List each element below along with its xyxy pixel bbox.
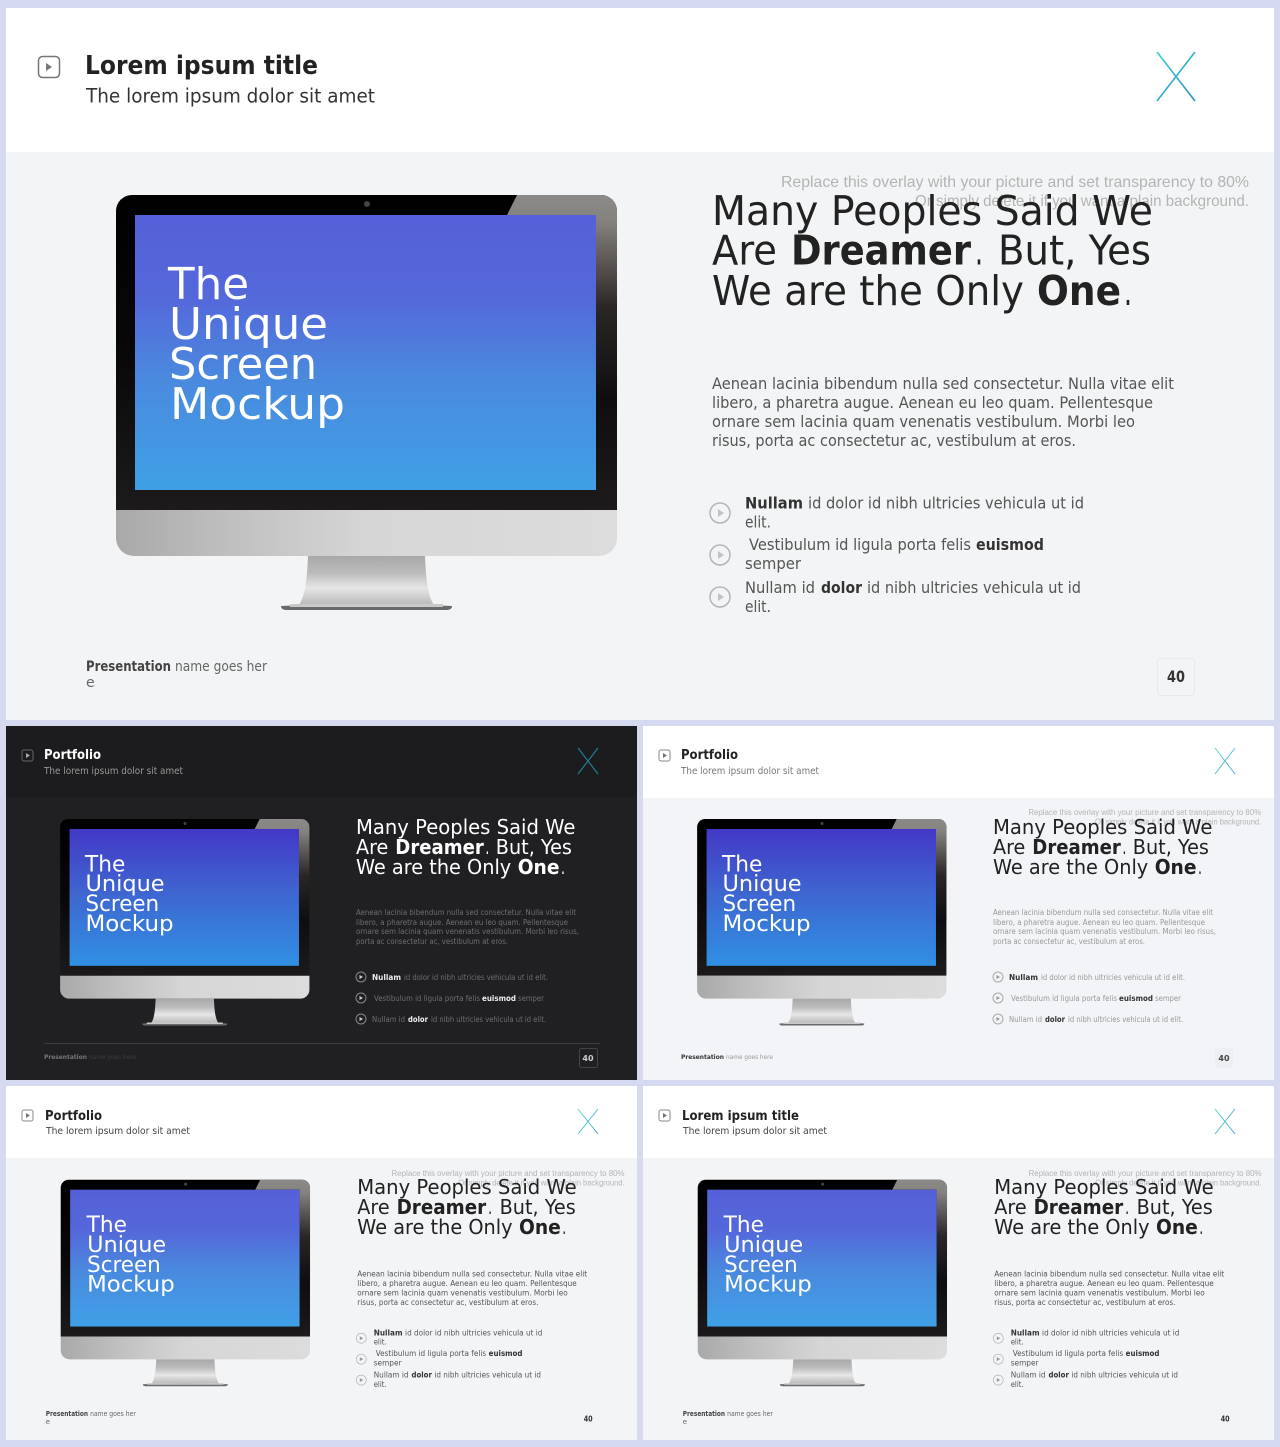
footer text: name goes her <box>727 1410 773 1418</box>
footer text: Presentation <box>86 659 171 675</box>
bullet text: dolor <box>412 1371 432 1380</box>
bullet text: semper <box>518 994 545 1003</box>
page number box <box>1215 1048 1233 1068</box>
icon: bullets <box>993 972 1003 1024</box>
body paragraph: risus, porta ac consectetur ac, vestibulum at eros. <box>357 1298 538 1307</box>
title: Lorem ipsum title <box>85 51 318 81</box>
panel: light slide bottom right <box>643 1086 1274 1440</box>
icon: bullets <box>356 972 366 1024</box>
screen caption: Unique <box>87 1233 166 1258</box>
heading: One <box>519 1215 561 1239</box>
icon: play square <box>22 1110 33 1121</box>
bullet text: elit. <box>374 1338 387 1347</box>
icon: bullet 3 <box>710 587 730 607</box>
page number text: 40 <box>584 1414 593 1423</box>
page number box <box>580 1048 598 1068</box>
bullet text: id nibh ultricies vehicula ut id <box>1071 1371 1178 1380</box>
heading: . <box>1199 1215 1203 1239</box>
heading: Many Peoples Said We <box>993 815 1212 839</box>
page number box: 40 <box>582 1054 594 1063</box>
main slide header band <box>6 8 1274 152</box>
heading: One <box>1156 1215 1198 1239</box>
screen caption: The <box>721 852 762 877</box>
heading: One <box>1037 267 1121 315</box>
bullet text: semper <box>374 1359 402 1368</box>
heading: Dreamer <box>397 1195 486 1219</box>
footer text: Presentation <box>44 1053 87 1061</box>
bullet list <box>356 972 548 1024</box>
heading: . <box>1198 855 1202 879</box>
icon: play square <box>659 750 670 761</box>
screen caption: Mockup <box>170 379 345 430</box>
monitor mockup and caption <box>61 1180 310 1386</box>
title: Portfolio <box>681 748 738 763</box>
heading: Dreamer <box>395 835 484 859</box>
bullet text: Nullam id <box>374 1371 409 1380</box>
body paragraph: libero, a pharetra augue. Aenean eu leo quam. Pellentesque <box>993 918 1205 927</box>
footer text: Presentation <box>683 1410 725 1418</box>
page number box <box>1158 658 1194 696</box>
bullet 1 text: id dolor id nibh ultricies vehicula ut id <box>808 494 1084 512</box>
heading: But, Yes <box>998 226 1151 274</box>
footer text: name goes here <box>726 1053 773 1061</box>
bullet text: Nullam <box>1009 973 1038 982</box>
bullet 3 text: dolor <box>821 578 862 597</box>
heading: But, Yes <box>496 835 572 859</box>
screen caption: The <box>84 852 125 877</box>
footer text: name goes here <box>89 1053 136 1061</box>
heading: Dreamer <box>791 226 972 274</box>
heading: Many Peoples Said We <box>356 815 575 839</box>
header band <box>6 1086 637 1158</box>
bullet text: euismod <box>482 994 516 1003</box>
heading: But, Yes <box>500 1195 576 1219</box>
bullet text: id dolor id nibh ultricies vehicula ut id elit. <box>404 973 548 982</box>
bullet 3 text: Nullam id <box>745 578 815 597</box>
text column <box>46 1169 625 1426</box>
bullet list <box>993 972 1185 1024</box>
icon: bullets <box>993 1333 1003 1385</box>
bullet text: euismod <box>1126 1349 1160 1358</box>
screen caption: Screen <box>169 339 317 390</box>
body paragraph: libero, a pharetra augue. Aenean eu leo quam. Pellentesque <box>357 1279 577 1288</box>
body paragraph: ornare sem lacinia quam venenatis vestibulum. Morbi leo risus, <box>356 927 579 936</box>
bullet text: Nullam id <box>1011 1371 1046 1380</box>
screen caption: Mockup <box>724 1273 812 1298</box>
panel: light slide bottom left <box>6 1086 637 1440</box>
bullet 2 text: euismod <box>976 535 1044 554</box>
bullet text: Nullam id <box>372 1015 405 1024</box>
panel: light slide top right <box>643 726 1274 1080</box>
screen caption: Unique <box>724 1233 803 1258</box>
screen caption: The <box>86 1213 127 1238</box>
bullet text: id dolor id nibh ultricies vehicula ut id <box>405 1328 542 1337</box>
bullet 2 text: semper <box>745 554 801 573</box>
overlay note: Replace this overlay with your picture and set transparency to 80% <box>781 174 1249 191</box>
body paragraph: Aenean lacinia bibendum nulla sed consectetur. Nulla vitae elit <box>356 908 576 917</box>
body paragraph: libero, a pharetra augue. Aenean eu leo quam. Pellentesque <box>356 918 568 927</box>
heading: Many Peoples Said We <box>994 1175 1214 1199</box>
monitor mockup and caption <box>698 1180 947 1386</box>
heading: We are the Only <box>712 267 1024 315</box>
footer text: name goes her <box>175 659 267 675</box>
bullet text: elit. <box>374 1380 387 1389</box>
heading: We are the Only <box>357 1215 513 1239</box>
bullet text: dolor <box>1045 1015 1065 1024</box>
title: Portfolio <box>45 1109 102 1124</box>
overlay note: Replace this overlay with your picture and set transparency to 80% <box>392 1169 625 1178</box>
overlay note: Or simply delete it if you want a plain background. <box>915 193 1249 210</box>
monitor mockup and caption <box>697 819 946 1026</box>
screen caption: Screen <box>85 892 159 917</box>
heading: Dreamer <box>1032 835 1121 859</box>
body paragraph: Aenean lacinia bibendum nulla sed consectetur. Nulla vitae elit <box>993 908 1213 917</box>
screen caption: Mockup <box>722 912 811 937</box>
body paragraph: ornare sem lacinia quam venenatis vestibulum. Morbi leo <box>994 1288 1205 1297</box>
bullet text: dolor <box>408 1015 428 1024</box>
bullet 3 text: elit. <box>745 597 771 616</box>
screen caption: Unique <box>169 299 328 350</box>
icon: bullet 2 <box>710 545 730 565</box>
heading: Are <box>357 1195 390 1219</box>
heading: Are <box>994 1195 1027 1219</box>
bullet text: Vestibulum id ligula porta felis <box>1011 994 1117 1003</box>
footer text: name goes her <box>90 1410 136 1418</box>
title: Portfolio <box>44 748 101 763</box>
icon: X logo <box>578 748 598 774</box>
bullet text: id nibh ultricies vehicula ut id <box>434 1371 541 1380</box>
heading: . <box>488 1195 492 1219</box>
bullet text: Nullam <box>1011 1328 1040 1337</box>
footer text: Presentation <box>46 1410 88 1418</box>
page number text: 40 <box>1221 1414 1230 1423</box>
bullet 1 text: Nullam <box>745 494 803 512</box>
heading: Many Peoples Said We <box>712 187 1153 235</box>
body paragraph: libero, a pharetra augue. Aenean eu leo quam. Pellentesque <box>994 1279 1214 1288</box>
body paragraph: porta ac consectetur ac, vestibulum at eros. <box>356 937 508 946</box>
bullet text: id nibh ultricies vehicula ut id elit. <box>1068 1015 1183 1024</box>
overlay note: Replace this overlay with your picture and set transparency to 80% <box>1028 808 1261 817</box>
dark header band <box>6 726 637 797</box>
screen caption: Screen <box>724 1253 798 1278</box>
body paragraph: Aenean lacinia bibendum nulla sed consectetur. Nulla vitae elit <box>712 374 1174 393</box>
bullet 3 text: id nibh ultricies vehicula ut id <box>867 578 1081 597</box>
panel: dark slide <box>6 726 637 1080</box>
bullet text: elit. <box>1011 1380 1024 1389</box>
body paragraph: Aenean lacinia bibendum nulla sed consectetur. Nulla vitae elit <box>357 1270 587 1279</box>
heading: . <box>1124 267 1132 315</box>
bullet text: id nibh ultricies vehicula ut id elit. <box>431 1015 546 1024</box>
page number box: 40 <box>1167 667 1185 686</box>
header band <box>643 1086 1274 1158</box>
subtitle: The lorem ipsum dolor sit amet <box>85 84 375 108</box>
overlay note: Or simply delete it if you want a plain background. <box>1095 1179 1262 1188</box>
icon: X logo <box>1215 748 1235 774</box>
body paragraph: ornare sem lacinia quam venenatis vestibulum. Morbi leo <box>712 412 1135 431</box>
body paragraph: porta ac consectetur ac, vestibulum at eros. <box>993 937 1145 946</box>
heading: But, Yes <box>1137 1195 1213 1219</box>
overlay note: Or simply delete it if you want a plain background. <box>1095 818 1261 827</box>
heading: . <box>562 1215 566 1239</box>
monitor mockup <box>116 195 617 610</box>
heading: . <box>975 226 983 274</box>
icon: play square <box>659 1110 670 1121</box>
footer text: e <box>683 1418 687 1426</box>
page number box: 40 <box>1218 1054 1230 1063</box>
panel: main slide <box>6 8 1274 720</box>
screen caption: The <box>167 259 249 310</box>
icon: X logo <box>578 1109 598 1134</box>
bullet text: semper <box>1011 1359 1039 1368</box>
screen caption: Unique <box>85 872 165 897</box>
heading: Are <box>712 226 777 274</box>
bullet text: Vestibulum id ligula porta felis <box>376 1349 486 1358</box>
subtitle: The lorem ipsum dolor sit amet <box>680 766 819 777</box>
body paragraph: risus, porta ac consectetur ac, vestibulum at eros. <box>712 431 1076 450</box>
bullet text: id dolor id nibh ultricies vehicula ut id elit. <box>1041 973 1185 982</box>
icon: bullets <box>356 1333 366 1385</box>
bullet text: Vestibulum id ligula porta felis <box>374 994 480 1003</box>
icon: bullet 1 <box>710 503 730 523</box>
bullet text: Vestibulum id ligula porta felis <box>1013 1349 1123 1358</box>
screen caption: The <box>723 1213 764 1238</box>
text column <box>683 1169 1262 1426</box>
body paragraph: libero, a pharetra augue. Aenean eu leo quam. Pellentesque <box>712 393 1153 412</box>
footer text: e <box>46 1418 50 1426</box>
bullet 1 text: elit. <box>745 512 771 532</box>
bullet 2 text: Vestibulum id ligula porta felis <box>749 535 971 554</box>
body paragraph: ornare sem lacinia quam venenatis vestibulum. Morbi leo <box>357 1288 568 1297</box>
heading: Are <box>993 835 1025 859</box>
screen caption: Screen <box>87 1253 161 1278</box>
heading: We are the Only <box>356 855 511 879</box>
bullet text: Nullam id <box>1009 1015 1042 1024</box>
icon: play square <box>22 750 33 761</box>
heading: One <box>518 855 560 879</box>
bullet text: id dolor id nibh ultricies vehicula ut id <box>1042 1328 1179 1337</box>
heading: One <box>1155 855 1197 879</box>
subtitle: The lorem ipsum dolor sit amet <box>682 1126 827 1137</box>
subtitle: The lorem ipsum dolor sit amet <box>43 766 183 777</box>
bullet text: semper <box>1155 994 1182 1003</box>
screen caption: Mockup <box>87 1273 175 1298</box>
heading: Are <box>356 835 388 859</box>
subtitle: The lorem ipsum dolor sit amet <box>45 1126 190 1137</box>
title: Lorem ipsum title <box>682 1109 799 1124</box>
heading: . <box>561 855 565 879</box>
bullet text: Nullam <box>372 973 401 982</box>
heading: We are the Only <box>993 855 1148 879</box>
icon: X logo <box>1215 1109 1235 1134</box>
body paragraph: ornare sem lacinia quam venenatis vestibulum. Morbi leo risus, <box>993 927 1216 936</box>
heading: Many Peoples Said We <box>357 1175 577 1199</box>
footer divider <box>44 1043 600 1044</box>
heading: Dreamer <box>1034 1195 1123 1219</box>
heading: . <box>1122 835 1126 859</box>
header band <box>643 726 1274 798</box>
body paragraph: Aenean lacinia bibendum nulla sed consectetur. Nulla vitae elit <box>994 1270 1224 1279</box>
bullet text: Nullam <box>374 1328 403 1337</box>
overlay note: Or simply delete it if you want a plain background. <box>458 1179 625 1188</box>
footer text: Presentation <box>681 1053 724 1061</box>
footer text: e <box>86 675 95 691</box>
bullet text: dolor <box>1049 1371 1069 1380</box>
bullet text: euismod <box>1119 994 1153 1003</box>
bullet text: elit. <box>1011 1338 1024 1347</box>
heading: We are the Only <box>994 1215 1150 1239</box>
bullet list <box>710 494 1084 616</box>
monitor mockup and caption <box>60 819 309 1026</box>
heading: . <box>1125 1195 1129 1219</box>
screen caption: Unique <box>722 872 802 897</box>
body paragraph: risus, porta ac consectetur ac, vestibulum at eros. <box>994 1298 1175 1307</box>
icon: play square <box>38 56 60 78</box>
overlay note: Replace this overlay with your picture and set transparency to 80% <box>1029 1169 1262 1178</box>
bullet text: euismod <box>489 1349 523 1358</box>
heading: But, Yes <box>1133 835 1209 859</box>
screen caption: Screen <box>722 892 796 917</box>
screen caption: Mockup <box>85 912 174 937</box>
icon: X logo <box>1157 52 1195 101</box>
heading: . <box>485 835 489 859</box>
